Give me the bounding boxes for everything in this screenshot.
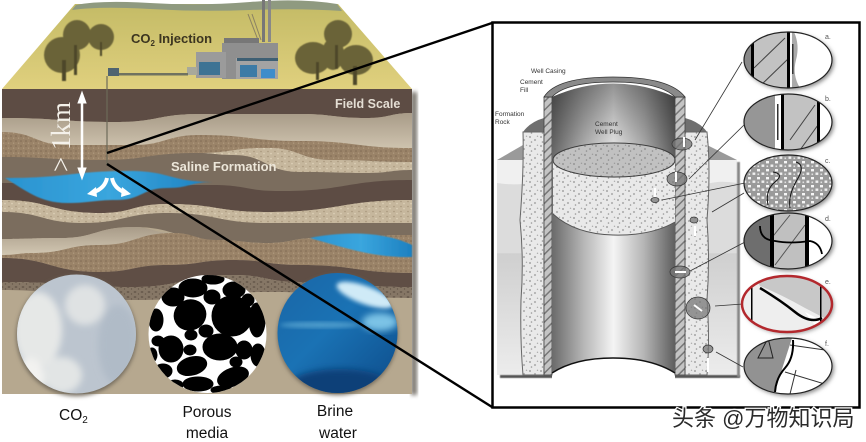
CO2 injection label: CO xyxy=(131,31,150,46)
inset d: leak through casing xyxy=(744,213,834,271)
dark speckled layer xyxy=(2,275,412,300)
leak spots xyxy=(651,138,713,353)
panel: field scale block diagram xyxy=(2,0,417,395)
pale tan wedge xyxy=(2,227,153,255)
bore base white xyxy=(552,350,675,380)
inset letters: b. xyxy=(825,96,831,103)
cement top mound xyxy=(523,118,707,140)
label: porous media: Porous xyxy=(182,404,232,421)
formation rock xyxy=(497,145,740,378)
rock strata xyxy=(2,89,412,394)
grey layer xyxy=(2,212,412,243)
casing rim xyxy=(544,77,685,97)
inset b: cement gap xyxy=(744,94,834,152)
trees left xyxy=(44,20,114,81)
block shadow xyxy=(411,92,417,395)
grey saline formation layer xyxy=(2,152,412,191)
inset letters xyxy=(825,34,831,348)
top dark layer xyxy=(2,89,412,122)
cement well plug xyxy=(553,143,675,235)
well diagram xyxy=(495,62,745,380)
well labels: Well Casing xyxy=(531,68,566,75)
power plant xyxy=(187,0,278,79)
inset e: highlighted shear fracture xyxy=(742,276,834,334)
cement fill xyxy=(520,132,709,375)
panel: well leakage detail frame xyxy=(492,22,860,408)
speckled brown layer two xyxy=(2,233,412,273)
inset letters: f. xyxy=(825,341,829,348)
inset letters: d. xyxy=(825,216,831,223)
well labels: Well Plug xyxy=(595,129,623,136)
watermark: 头条 @万物知识局 xyxy=(672,406,854,431)
circle: brine water xyxy=(278,273,398,401)
well labels xyxy=(495,68,623,136)
label: brine water: Brine xyxy=(317,403,353,420)
label: brine water: water xyxy=(318,425,357,442)
well bore interior xyxy=(552,97,675,373)
light speckled lens xyxy=(197,148,412,173)
CO2 injection label: 2 xyxy=(150,39,156,48)
callout lines to well detail xyxy=(107,23,492,407)
label: porous media: media xyxy=(186,425,228,442)
leader lines xyxy=(662,62,745,367)
saline formation label: Saline Formation xyxy=(171,159,277,174)
inset letters: a. xyxy=(825,34,831,41)
depth arrow xyxy=(78,92,86,179)
leak flow arrows xyxy=(655,137,708,372)
depth label: > 1km xyxy=(46,102,76,172)
light speckled layer xyxy=(2,200,412,223)
circle: CO2 clouds xyxy=(14,274,138,398)
well labels: Rock xyxy=(495,119,511,126)
inset f: formation fracture xyxy=(744,338,834,396)
trees right xyxy=(295,20,373,85)
well labels: Cement xyxy=(520,79,543,86)
circle: porous media xyxy=(148,275,266,393)
well casing xyxy=(544,97,685,375)
CO2 injection label: Injection xyxy=(155,31,212,46)
well shaft xyxy=(106,89,108,165)
surface landscape xyxy=(2,0,412,89)
bottom arc xyxy=(552,358,675,373)
dark layer two xyxy=(2,180,412,213)
inset letters: e. xyxy=(825,279,831,286)
label: CO2: CO xyxy=(59,407,82,424)
inset c: cement fractures xyxy=(744,155,834,213)
field scale label: Field Scale xyxy=(335,97,400,111)
well labels: Formation xyxy=(495,111,525,118)
speckled brown layer xyxy=(2,132,412,162)
pipeline and wellhead xyxy=(107,68,188,89)
well labels: Cement xyxy=(595,121,618,128)
inset letters: c. xyxy=(825,158,830,165)
inset a: casing gap xyxy=(744,32,834,90)
brine lens right xyxy=(310,234,412,257)
label: CO2: 2 xyxy=(82,415,88,426)
co2 plume arrows xyxy=(87,178,131,197)
pale tan layer xyxy=(2,113,412,152)
brine lens left xyxy=(5,171,213,203)
well labels: Fill xyxy=(520,87,529,94)
dark layer three xyxy=(2,258,412,287)
